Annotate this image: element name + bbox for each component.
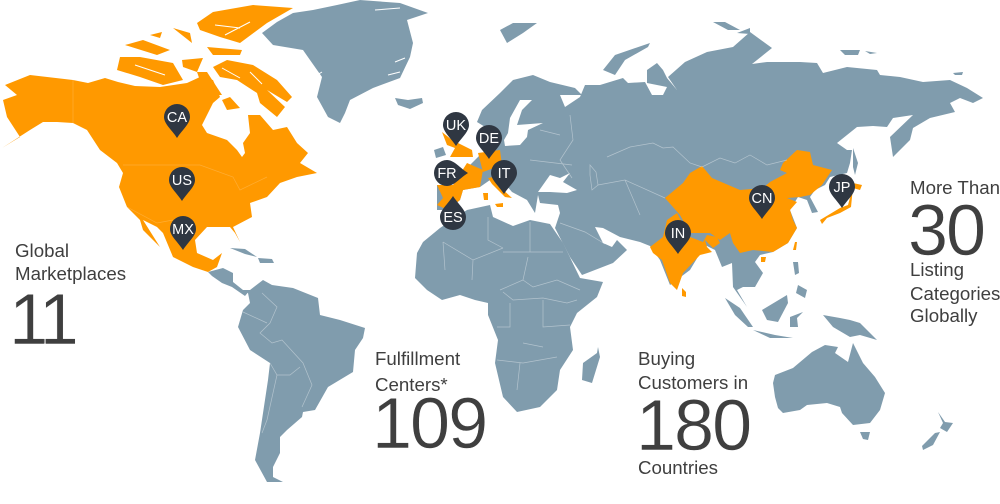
Baltic Sea bbox=[504, 100, 543, 146]
Japan bbox=[820, 183, 862, 224]
Philippines bbox=[793, 262, 807, 298]
pin: United States: US bbox=[172, 173, 192, 189]
Ireland bbox=[434, 147, 446, 158]
pin: Japan: JP bbox=[834, 180, 850, 196]
stat: global marketplaces: 11 bbox=[9, 280, 76, 360]
North America: Canada, US, Mexico bbox=[2, 75, 317, 272]
Tasmania bbox=[860, 432, 870, 440]
Canadian Arctic islands bbox=[117, 5, 293, 117]
pin: Spain bbox=[440, 196, 466, 230]
South America bbox=[238, 280, 365, 482]
Italy bbox=[483, 176, 512, 207]
Greenland bbox=[262, 0, 428, 123]
stat: buying customers: Customers in bbox=[638, 372, 748, 393]
pin: China bbox=[749, 185, 775, 219]
stat: listing categories bbox=[908, 177, 1000, 326]
Sulawesi bbox=[790, 312, 803, 327]
pin: China: CN bbox=[752, 191, 772, 207]
New Guinea bbox=[823, 315, 877, 340]
stat: listing categories: Categories bbox=[910, 283, 1000, 304]
Eurasia bbox=[437, 32, 983, 307]
stat: fulfillment centers: Fulfillment bbox=[375, 348, 461, 369]
pin: Canada: CA bbox=[167, 110, 187, 126]
pin: Spain: ES bbox=[443, 210, 463, 226]
stat: listing categories: 30 bbox=[908, 191, 984, 271]
Cuba bbox=[230, 248, 257, 257]
pin: United Kingdom bbox=[443, 112, 469, 146]
pin: France: FR bbox=[437, 166, 457, 182]
New Zealand bbox=[922, 412, 953, 450]
stat: listing categories: More Than bbox=[910, 177, 1000, 198]
pin: Mexico bbox=[170, 216, 196, 250]
Sakhalin bbox=[853, 148, 858, 175]
pin: Italy: IT bbox=[498, 166, 511, 182]
orange countries bbox=[2, 5, 862, 297]
UK bbox=[442, 132, 473, 157]
Severnaya Zemlya bbox=[713, 22, 750, 34]
Australia bbox=[773, 343, 885, 425]
pin: United States bbox=[169, 167, 195, 201]
pin: Canada bbox=[164, 104, 190, 138]
China bbox=[665, 150, 832, 253]
Hainan bbox=[761, 257, 766, 262]
stat: global marketplaces: Global bbox=[15, 240, 69, 261]
stat: fulfillment centers: 109 bbox=[372, 384, 486, 464]
pin: Germany: DE bbox=[479, 131, 499, 147]
stat: buying customers: Buying bbox=[638, 348, 695, 369]
Black Sea bbox=[538, 173, 577, 193]
stat: global marketplaces bbox=[9, 240, 126, 360]
Germany bbox=[478, 150, 502, 172]
Hispaniola bbox=[258, 258, 274, 263]
pin: India: IN bbox=[671, 226, 685, 242]
pin: France bbox=[434, 160, 468, 186]
Sri Lanka bbox=[682, 288, 686, 297]
stat: fulfillment centers bbox=[372, 348, 486, 464]
Sumatra bbox=[725, 298, 753, 327]
pin: India bbox=[665, 220, 691, 254]
stat: fulfillment centers: Centers* bbox=[375, 374, 448, 395]
inland seas bbox=[504, 100, 577, 193]
fjords and channels bbox=[135, 8, 405, 84]
Borneo bbox=[762, 295, 788, 322]
Java bbox=[753, 330, 793, 338]
stat: buying customers: 180 bbox=[636, 386, 750, 466]
gray land masses bbox=[208, 0, 983, 482]
Madagascar bbox=[582, 347, 600, 383]
pin: Italy bbox=[491, 160, 517, 194]
India bbox=[650, 213, 720, 290]
stat: global marketplaces: Marketplaces bbox=[15, 263, 126, 284]
Taiwan bbox=[793, 242, 797, 250]
Novaya Zemlya bbox=[603, 43, 650, 75]
New Siberian Islands bbox=[840, 50, 877, 55]
stat: buying customers: Countries bbox=[638, 457, 718, 478]
pin: Mexico: MX bbox=[172, 222, 194, 238]
Africa bbox=[415, 205, 603, 412]
pin: Germany bbox=[476, 125, 502, 159]
Iceland bbox=[395, 98, 423, 109]
Svalbard bbox=[500, 23, 537, 43]
stat: listing categories: Globally bbox=[910, 305, 978, 326]
country borders bbox=[243, 115, 787, 433]
stat: buying customers bbox=[636, 348, 750, 478]
Spain and France bbox=[437, 163, 483, 210]
Central America bbox=[208, 268, 250, 296]
Wrangel Island bbox=[953, 72, 963, 75]
pin: United Kingdom: UK bbox=[446, 118, 466, 134]
stat: listing categories: Listing bbox=[910, 259, 964, 280]
pin: Japan bbox=[829, 174, 855, 208]
